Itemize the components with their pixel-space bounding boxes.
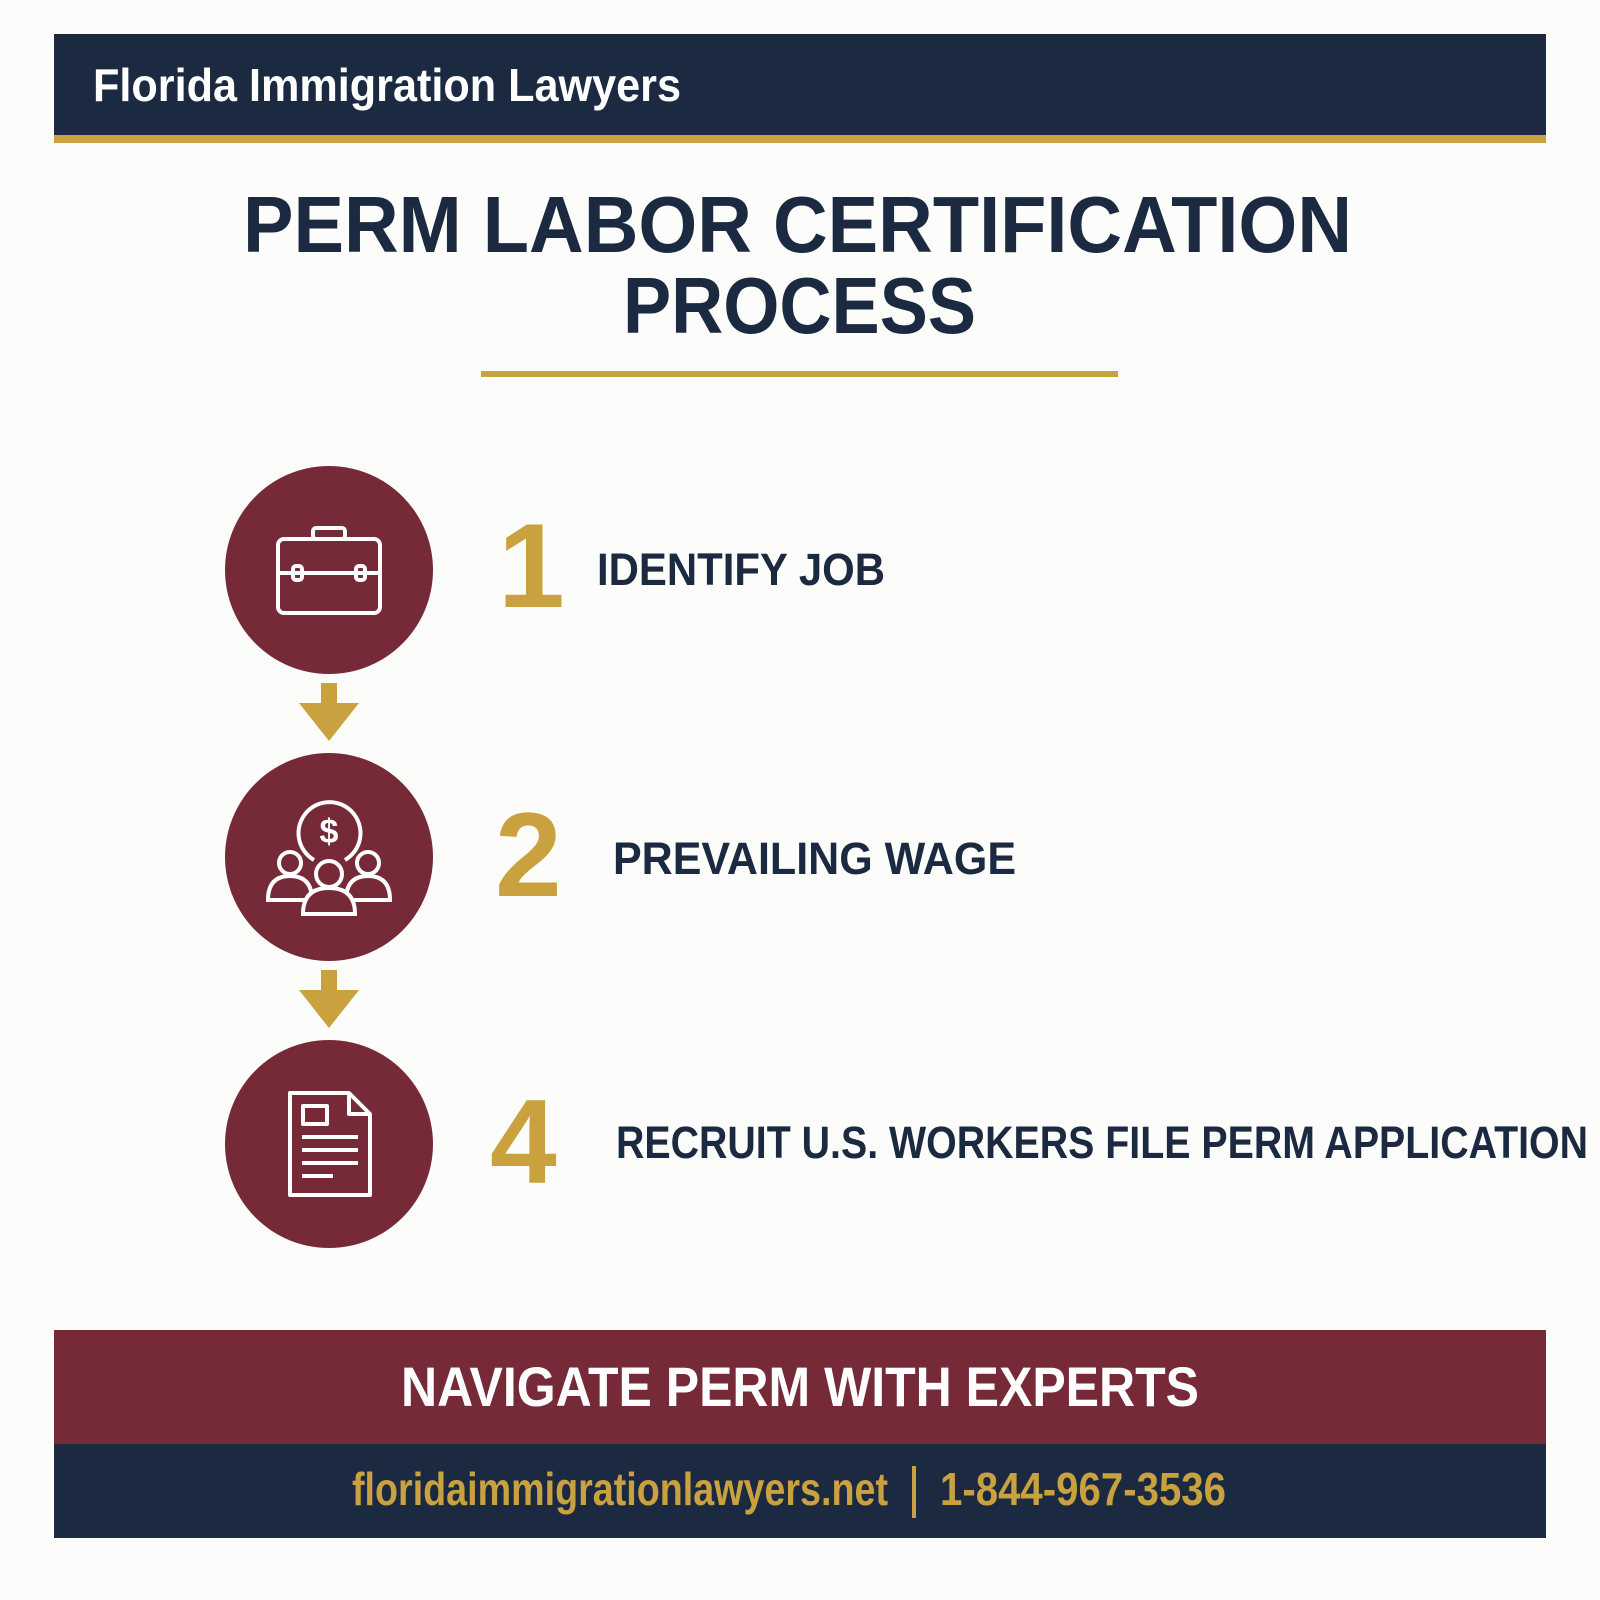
step 2 number: 2 xyxy=(495,788,562,922)
header text: Florida Immigration Lawyers xyxy=(93,59,681,111)
arrow 1 xyxy=(299,683,359,741)
step 1 number: 1 xyxy=(498,499,565,633)
arrow 2 xyxy=(299,970,359,1028)
step 1 circle with briefcase icon xyxy=(225,466,433,674)
step 4 number: 4 xyxy=(490,1075,557,1209)
title xyxy=(243,180,1352,350)
title: PERM LABOR CERTIFICATION xyxy=(243,180,1352,269)
footer call to action band: NAVIGATE PERM WITH EXPERTS xyxy=(401,1355,1199,1418)
step 4 circle with document icon xyxy=(225,1040,433,1248)
footer contact band: 1-844-967-3536 xyxy=(940,1463,1226,1515)
title underline xyxy=(481,371,1118,377)
header bar xyxy=(54,34,1546,143)
step 2 label: PREVAILING WAGE xyxy=(613,833,1016,884)
step 2 circle with wage icon xyxy=(225,753,433,961)
footer contact band xyxy=(54,1444,1546,1538)
footer call to action band xyxy=(54,1330,1546,1444)
step 2 circle with wage icon: $ xyxy=(320,813,339,851)
title: PROCESS xyxy=(623,261,976,350)
footer contact band: floridaimmigrationlawyers.net xyxy=(352,1463,888,1515)
step 1 label: IDENTIFY JOB xyxy=(597,544,885,595)
